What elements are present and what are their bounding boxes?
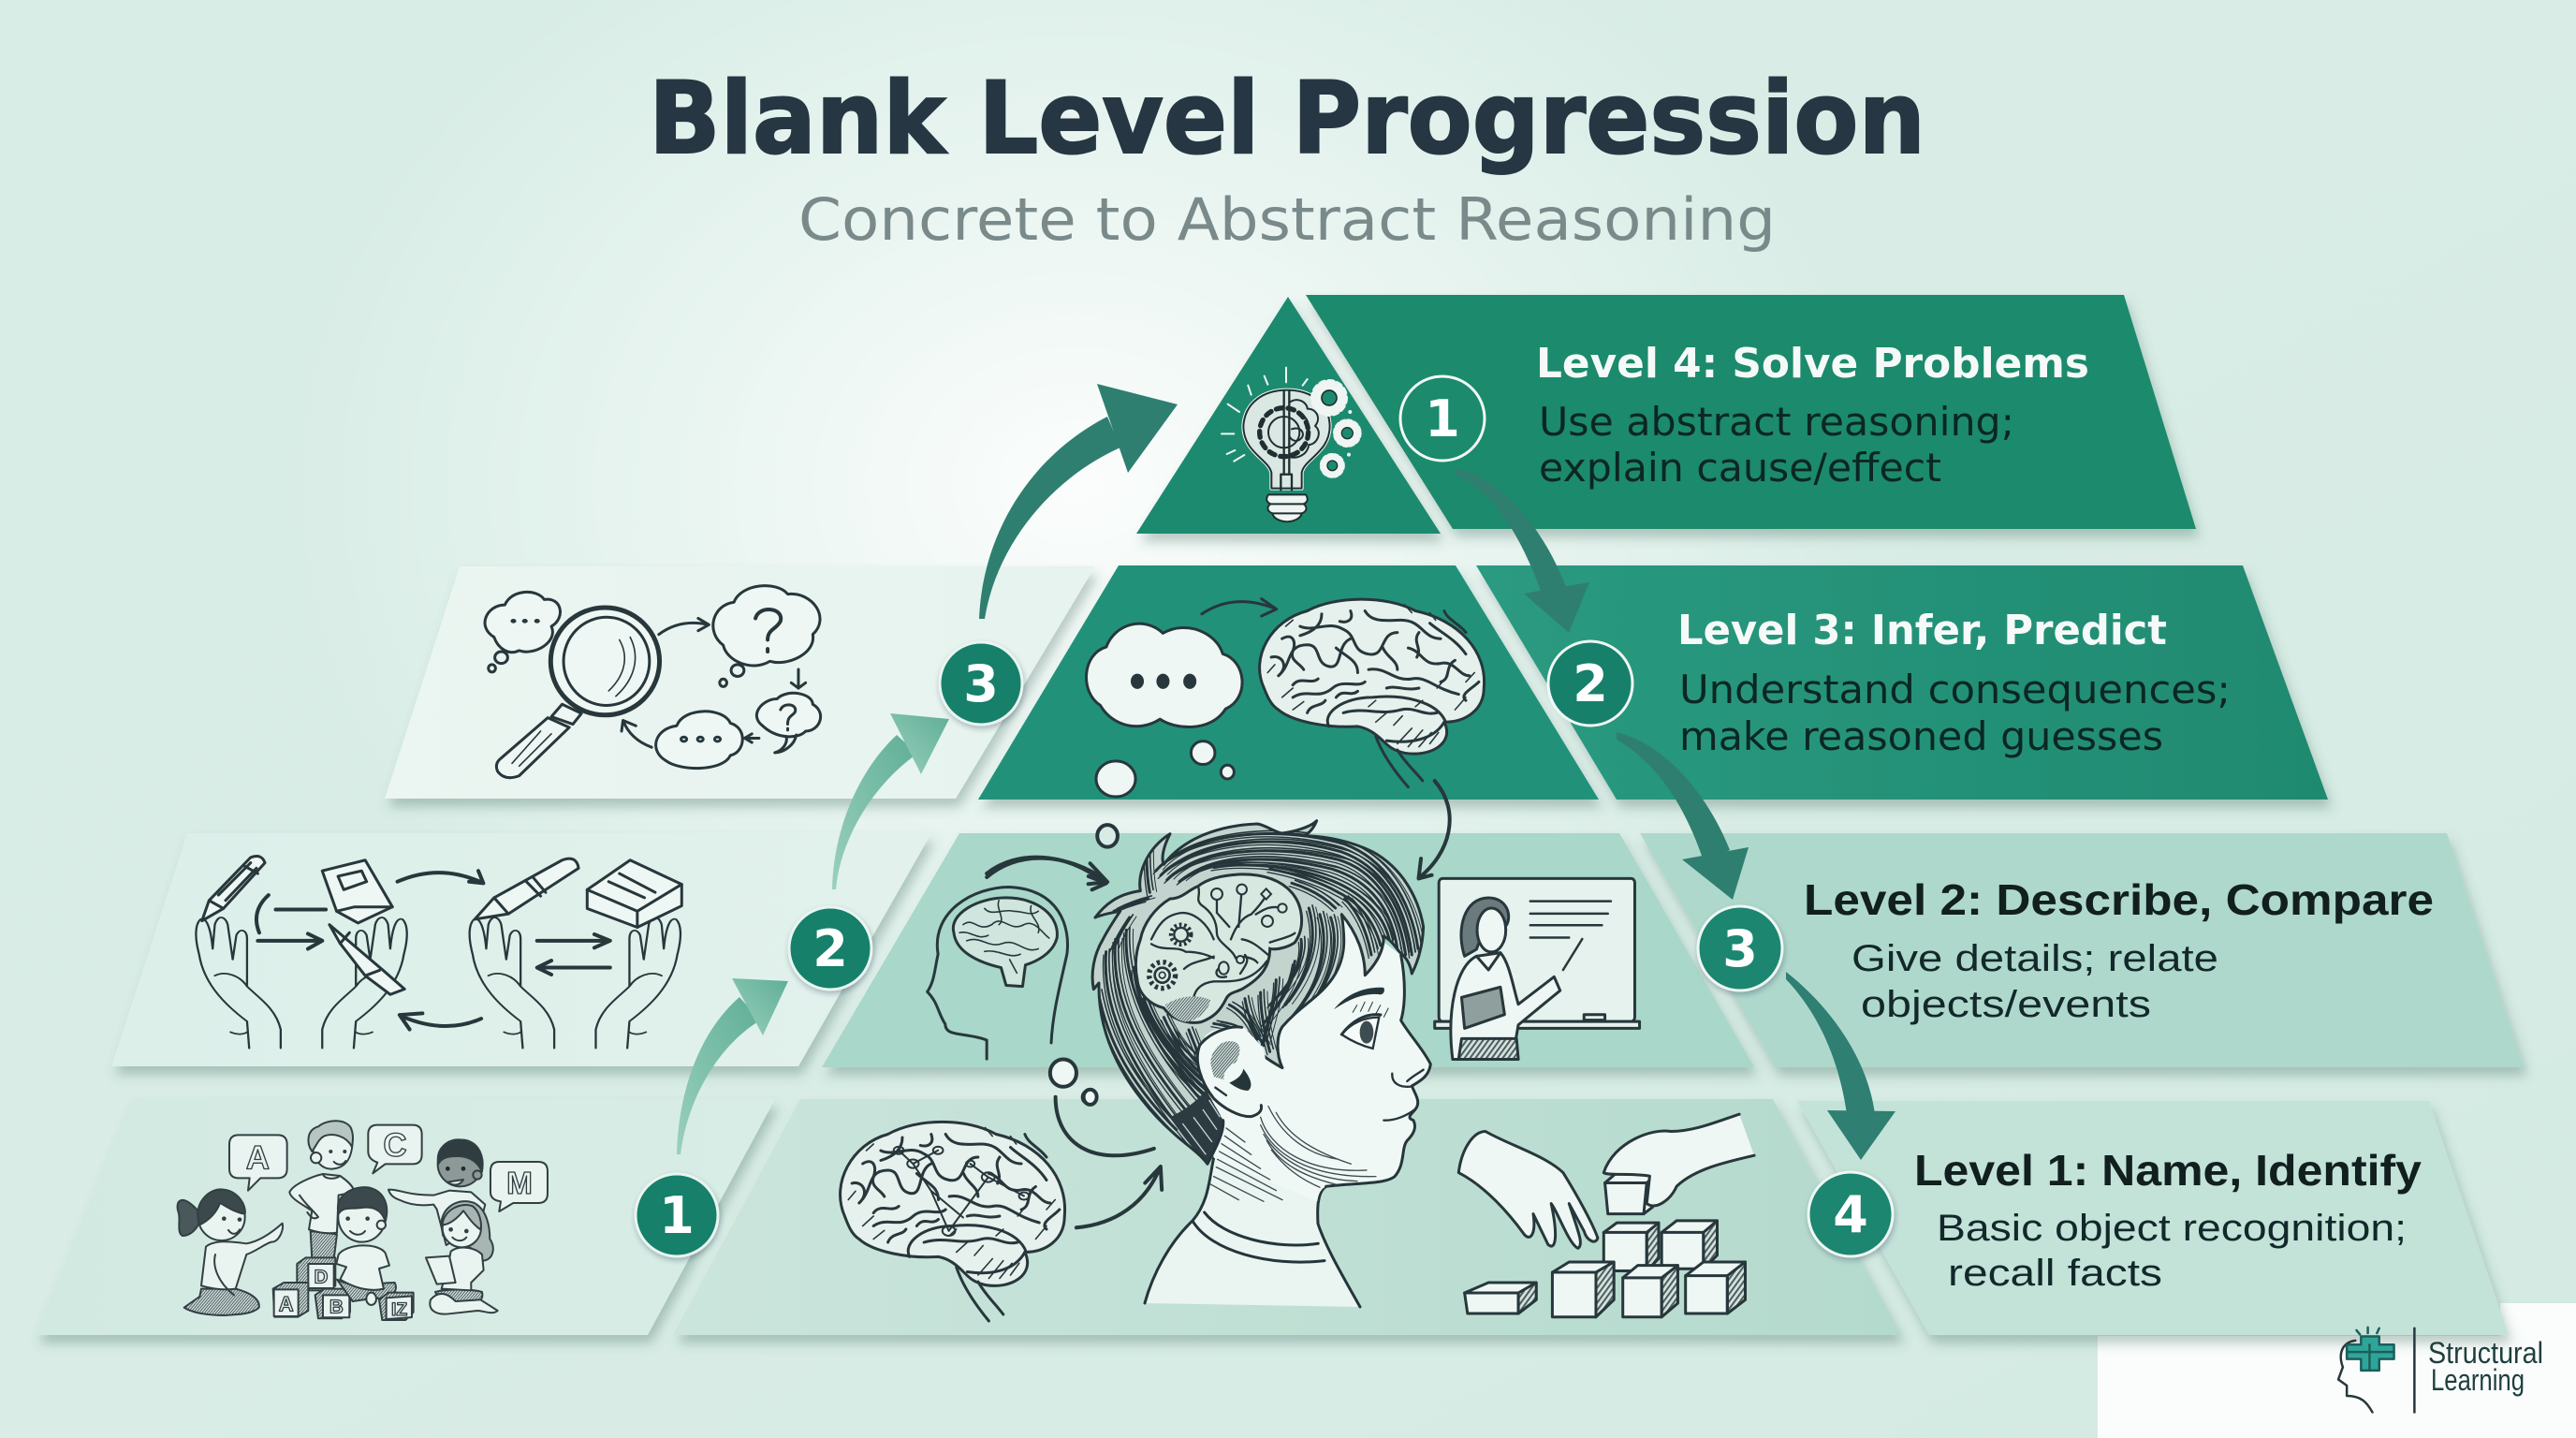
- text block: level 3: make reasoned guesses: [1679, 713, 2163, 759]
- text block: level 3: [1548, 607, 2231, 759]
- speech bubble C: [368, 1125, 422, 1173]
- text block: level 1: Level 1: Name, Identify: [1914, 1146, 2422, 1195]
- text block: level 4: explain cause/effect: [1539, 445, 1941, 491]
- boy hair strands: [1096, 830, 1425, 1164]
- text block: level 2: Give details; relate: [1852, 938, 2218, 979]
- panel: level 4 description: [1306, 295, 2196, 529]
- icon: hands stacking blocks: [1458, 1114, 1754, 1317]
- text block: level 2: [1698, 875, 2434, 1025]
- panel: level 2 left illustration: [111, 833, 931, 1066]
- boy eye and brow: [1334, 988, 1388, 1049]
- panel: level 1 description: [1797, 1101, 2509, 1335]
- text block: level 3: 2: [1573, 654, 1608, 713]
- letter blocks: D: [315, 1267, 329, 1288]
- logo: Structural Learning: Structural: [2428, 1336, 2543, 1370]
- text block: level 1: [1808, 1146, 2422, 1294]
- letter blocks: A: [279, 1293, 294, 1316]
- logo: Structural Learning: Learning: [2431, 1363, 2525, 1397]
- speech bubble M: [490, 1162, 548, 1211]
- arrow: level 3 to level 2: [1617, 732, 1749, 900]
- arrow: step 3 to apex: [979, 384, 1178, 619]
- boy neck and jaw hatching: [1210, 1107, 1376, 1201]
- panel: level 2 description: [1640, 833, 2524, 1067]
- standing boy: [289, 1121, 354, 1259]
- text block: level 2: Level 2: Describe, Compare: [1804, 875, 2434, 924]
- panel: level 3 left illustration: [385, 566, 1095, 799]
- icon: boy profile: [1092, 821, 1430, 1307]
- panel: level 1 centre: [673, 1099, 1901, 1335]
- arrow: step 2 to 3: [832, 713, 949, 889]
- arrow: level 4 to level 3: [1456, 468, 1589, 633]
- pyramid panels: [36, 295, 2524, 1335]
- girl reading: [426, 1201, 498, 1314]
- speech bubble M: M: [506, 1167, 533, 1201]
- block IZ: [379, 1293, 414, 1320]
- boy brain with gears: [1135, 874, 1302, 1022]
- icon: children naming letters: [178, 1121, 548, 1320]
- icon: head silhouette with brain: [928, 858, 1106, 1104]
- text block: level 1: 4: [1833, 1185, 1868, 1244]
- boy hair outline: [1092, 821, 1424, 1164]
- icon: teacher at whiteboard: [1435, 878, 1640, 1059]
- icon: thought cloud: [1087, 599, 1277, 847]
- panel: level 4 icon triangle: [1136, 297, 1441, 534]
- seated boy: [336, 1187, 396, 1305]
- icon: magnifier and thought clouds: [485, 586, 821, 778]
- subtitle: Concrete to Abstract Reasoning: [798, 185, 1776, 254]
- boy neck and shirt: [1145, 1158, 1360, 1307]
- step badge: left 1: [636, 1174, 718, 1256]
- panel: level 3 centre: [978, 565, 1599, 800]
- step badge: left 1: 1: [659, 1186, 695, 1245]
- panel: level 3 description: [1476, 565, 2328, 800]
- arrows around the boy: [987, 781, 1450, 1227]
- step badge: left 3: [940, 642, 1022, 725]
- speech bubble C: C: [383, 1127, 407, 1164]
- icon: lightbulb with gears: [1222, 368, 1360, 521]
- boy hair: [1092, 821, 1424, 1164]
- text block: level 3: Level 3: Infer, Predict: [1677, 607, 2167, 654]
- panel: level 1 left illustration: [36, 1099, 775, 1335]
- text block: level 4: [1400, 340, 2089, 491]
- panel: level 2 centre: [822, 833, 1754, 1067]
- step badge: left 2: [789, 907, 871, 990]
- boy ear: [1197, 1027, 1270, 1117]
- step badge: left 3: 3: [963, 654, 999, 713]
- block IZ: IZ: [391, 1300, 407, 1320]
- arrow: step 1 to 2: [677, 978, 788, 1154]
- icon: hands with pencils and books: [196, 856, 681, 1049]
- dark haired boy pointing: [388, 1139, 485, 1245]
- text block: level 4: Level 4: Solve Problems: [1536, 340, 2089, 388]
- boy nose and mouth: [1383, 1070, 1424, 1121]
- step badge: left 2: 2: [812, 919, 848, 978]
- text block: level 2: 3: [1722, 919, 1758, 978]
- speech bubble A: A: [246, 1139, 270, 1176]
- letter blocks: [273, 1257, 350, 1318]
- text block: level 2: objects/events: [1861, 984, 2151, 1025]
- boy face: [1201, 911, 1430, 1201]
- text block: level 1: Basic object recognition;: [1937, 1208, 2407, 1249]
- icon: row 1 brain: [841, 1122, 1065, 1321]
- speech bubble A: [229, 1135, 287, 1191]
- letter blocks: B: [329, 1297, 344, 1318]
- title: Blank Level Progression: [649, 61, 1925, 176]
- text block: level 4: 1: [1425, 389, 1460, 448]
- icon: level 3 brain: [1260, 599, 1485, 787]
- text block: level 1: recall facts: [1948, 1253, 2162, 1294]
- logo: Structural Learning: [2338, 1328, 2543, 1412]
- seated girl with ponytail: [178, 1189, 283, 1315]
- text block: level 3: Understand consequences;: [1679, 667, 2231, 712]
- text block: level 4: Use abstract reasoning;: [1539, 399, 2014, 445]
- arrow: level 2 to level 1: [1786, 972, 1895, 1160]
